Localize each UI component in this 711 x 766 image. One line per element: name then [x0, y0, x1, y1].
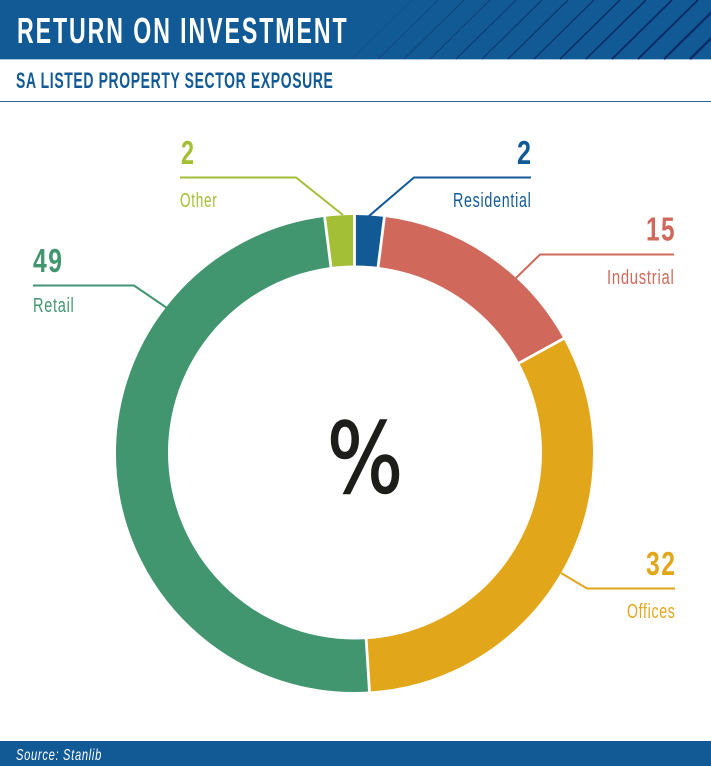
label: Industrial: 15 [646, 210, 676, 248]
label: Residential: Residential [453, 190, 532, 212]
footer band [0, 741, 711, 766]
segment: Retail 49 [143, 244, 368, 664]
subtitle: SA LISTED PROPERTY SECTOR EXPOSURE [16, 68, 334, 93]
label: Industrial [516, 210, 676, 289]
label: Residential: 2 [517, 134, 531, 171]
label: Other: 2 [181, 134, 194, 171]
segment: Industrial 15 [381, 244, 539, 352]
segment: Residential 2 [354, 242, 381, 244]
label: Residential [369, 134, 532, 216]
donut chart [143, 208, 570, 699]
percent symbol: % [327, 402, 403, 515]
source note: Source: Stanlib [16, 747, 102, 764]
title: RETURN ON INVESTMENT [17, 10, 348, 51]
label: Retail: 49 [33, 242, 64, 279]
label: Retail [33, 242, 167, 317]
segment: Offices 32 [368, 352, 565, 664]
label: Retail: Retail [33, 295, 74, 317]
label: Industrial: Industrial [607, 267, 674, 289]
segment: Other 2 [328, 242, 354, 244]
label: Other: Other [180, 190, 218, 212]
header band [0, 0, 711, 60]
label: Offices [561, 545, 676, 623]
label: Offices: Offices [627, 601, 676, 623]
label: Offices: 32 [646, 545, 676, 582]
label: Other [180, 134, 343, 215]
